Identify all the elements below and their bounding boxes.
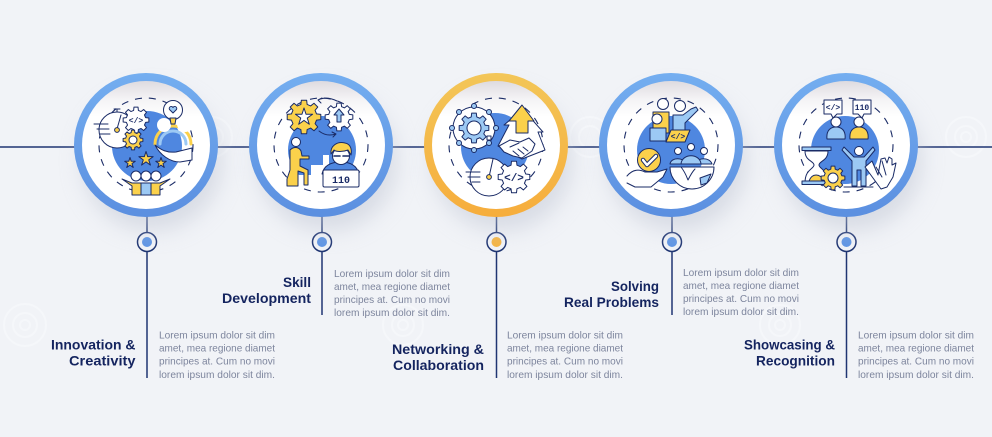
title 3: Collaboration bbox=[393, 357, 484, 373]
body 5: amet, mea regione diamet bbox=[858, 342, 974, 354]
body 2 bbox=[334, 268, 450, 319]
icon: programmer: 110 bbox=[332, 176, 350, 187]
title 1: Creativity bbox=[69, 352, 136, 368]
body 1: lorem ipsum dolor sit dim. bbox=[159, 369, 275, 381]
body 5: Lorem ipsum dolor sit dim bbox=[858, 330, 974, 342]
body 2: amet, mea regione diamet bbox=[334, 281, 450, 293]
icon: two users bbox=[827, 117, 868, 139]
icon: yellow gear bbox=[123, 130, 143, 150]
icon: team in hands bbox=[122, 171, 170, 195]
icon: network gear bbox=[450, 104, 498, 152]
body 4: Lorem ipsum dolor sit dim bbox=[683, 267, 799, 279]
icon: coding team: </> bbox=[671, 133, 685, 142]
body 1 bbox=[159, 330, 275, 381]
body 2: Lorem ipsum dolor sit dim bbox=[334, 268, 450, 280]
watermarks bbox=[4, 117, 986, 346]
icon: hand bbox=[627, 169, 667, 187]
marker 3 bbox=[487, 232, 506, 252]
icon: stopwatch bbox=[466, 136, 508, 196]
horizontal timeline bbox=[0, 146, 992, 148]
title 5: Showcasing & bbox=[744, 336, 835, 352]
body 1: Lorem ipsum dolor sit dim bbox=[159, 330, 275, 342]
icon: steps bbox=[299, 155, 329, 187]
body 4: lorem ipsum dolor sit dim. bbox=[683, 306, 799, 318]
title 4: Real Problems bbox=[564, 294, 659, 310]
body 4: amet, mea regione diamet bbox=[683, 280, 799, 292]
icon: hourglass bbox=[802, 147, 831, 184]
step 1: innovation and creativity bbox=[51, 73, 275, 381]
icon: gear bbox=[821, 166, 845, 190]
title 3 bbox=[392, 341, 484, 373]
body 1: principes at. Cum no movi bbox=[159, 356, 275, 368]
title 3: Networking & bbox=[392, 341, 484, 357]
connector 5 bbox=[846, 215, 848, 378]
title 4: Solving bbox=[611, 278, 659, 294]
icon: rainbow and bulb bbox=[155, 100, 193, 144]
icon: programmer bbox=[322, 143, 359, 187]
body 3: lorem ipsum dolor sit dim. bbox=[507, 369, 623, 381]
icon: cycle arrows bbox=[318, 98, 337, 137]
title 4 bbox=[564, 278, 659, 310]
icon: stopwatch bbox=[94, 109, 135, 148]
badge 4 bbox=[599, 73, 747, 231]
title 1: Innovation & bbox=[51, 336, 136, 352]
icon: hand bbox=[155, 145, 192, 162]
icon: code gear bbox=[123, 107, 149, 133]
step 4: solving real problems bbox=[564, 73, 799, 318]
body 4 bbox=[683, 267, 799, 318]
icon: binary bubble: 110 bbox=[855, 104, 869, 113]
body 5 bbox=[858, 330, 974, 381]
icon: code bubble: </> bbox=[826, 104, 840, 113]
icon: binary bubble bbox=[853, 100, 871, 118]
icon: coding team bbox=[650, 98, 698, 142]
icon: globe bbox=[670, 167, 714, 189]
marker 2 bbox=[312, 232, 332, 252]
title 1 bbox=[51, 336, 136, 368]
badge 2 bbox=[249, 73, 397, 231]
badge 1 bbox=[74, 73, 222, 231]
body 5: principes at. Cum no movi bbox=[858, 356, 974, 368]
body 5: lorem ipsum dolor sit dim. bbox=[858, 369, 974, 381]
title 2: Development bbox=[222, 290, 311, 306]
body 1: amet, mea regione diamet bbox=[159, 342, 275, 354]
icon: stars bbox=[125, 152, 166, 167]
icon: code gear bbox=[498, 161, 530, 193]
icon: code gear: </> bbox=[504, 173, 524, 185]
step 3: networking and collaboration bbox=[392, 73, 623, 381]
icon: star gear bbox=[287, 100, 321, 134]
body 4: principes at. Cum no movi bbox=[683, 293, 799, 305]
body 3: principes at. Cum no movi bbox=[507, 356, 623, 368]
icon: people bbox=[670, 144, 712, 164]
connector 3 bbox=[496, 215, 498, 378]
icon: cheering person bbox=[842, 146, 875, 187]
icon: raised hands bbox=[865, 157, 896, 189]
icon: climbing person bbox=[287, 138, 309, 186]
connector 1 bbox=[146, 215, 148, 378]
body 3: amet, mea regione diamet bbox=[507, 342, 623, 354]
icon: check mark bbox=[638, 148, 660, 172]
title 2: Skill bbox=[283, 274, 311, 290]
badge 3 bbox=[424, 73, 572, 231]
icon: code gear: </> bbox=[129, 117, 143, 126]
icon: arrows bbox=[498, 105, 545, 159]
connector 2 bbox=[321, 215, 323, 315]
body 3 bbox=[507, 330, 623, 381]
icon: code bubble bbox=[824, 100, 842, 118]
body 2: principes at. Cum no movi bbox=[334, 294, 450, 306]
title 2 bbox=[222, 274, 311, 306]
connector 4 bbox=[671, 215, 673, 315]
step 5: showcasing and recognition bbox=[744, 73, 974, 381]
badge 5 bbox=[774, 73, 922, 231]
icon: handshake bbox=[499, 138, 535, 158]
title 5: Recognition bbox=[756, 352, 835, 368]
body 2: lorem ipsum dolor sit dim. bbox=[334, 307, 450, 319]
title 5 bbox=[744, 336, 835, 368]
marker 4 bbox=[662, 232, 682, 252]
step 2: skill development bbox=[222, 73, 450, 319]
marker 1 bbox=[138, 232, 156, 252]
body 3: Lorem ipsum dolor sit dim bbox=[507, 330, 623, 342]
marker 5 bbox=[837, 232, 856, 252]
icon: arrow gear bbox=[325, 103, 353, 131]
